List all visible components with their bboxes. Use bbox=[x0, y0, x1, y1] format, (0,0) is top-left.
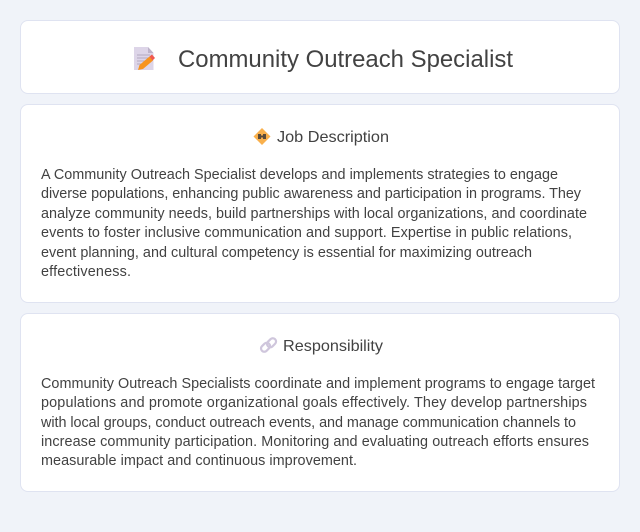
panel: job description card bbox=[20, 104, 620, 303]
icon: orange diamond bbox=[254, 128, 270, 145]
title: Community Outreach Specialist bbox=[178, 46, 513, 73]
text block: responsibility: with local groups, conduct outreach events, and manage communication channels to bbox=[40, 415, 576, 431]
text block: responsibility bbox=[40, 376, 595, 469]
heading: responsibility: Responsibility bbox=[283, 338, 383, 355]
heading: job description: Job Description bbox=[277, 129, 389, 146]
text block: job description: event planning, and cultural competency is essential for maximizing outreach bbox=[41, 245, 532, 261]
text block: job description: A Community Outreach Specialist develops and implements strategies to engage bbox=[41, 167, 558, 183]
text block: job description: events to foster inclusive communication and support. Expertise in public relations, bbox=[41, 225, 572, 241]
text block: responsibility: increase community participation. Monitoring and evaluating outreach efforts ensures bbox=[41, 434, 589, 450]
text block: job description: analyze community needs, build partnerships with local organizations, and coordinate bbox=[41, 206, 587, 222]
panel: title card bbox=[20, 20, 620, 94]
icon: document with pencil bbox=[134, 47, 155, 70]
text block: responsibility: measurable impact and continuous improvement. bbox=[41, 453, 357, 469]
icon: chain link bbox=[260, 337, 277, 353]
text block: responsibility: Community Outreach Specialists coordinate and implement programs to engage target bbox=[41, 376, 595, 392]
panel: responsibility card bbox=[20, 313, 620, 492]
text block: responsibility: populations and promote organizational goals effectively. They develop partnerships bbox=[41, 395, 587, 411]
text block: job description: effectiveness. bbox=[41, 264, 131, 280]
text block: job description: diverse populations, enhancing public awareness and participation in programs. They bbox=[41, 186, 582, 202]
text block: job description bbox=[41, 167, 587, 280]
